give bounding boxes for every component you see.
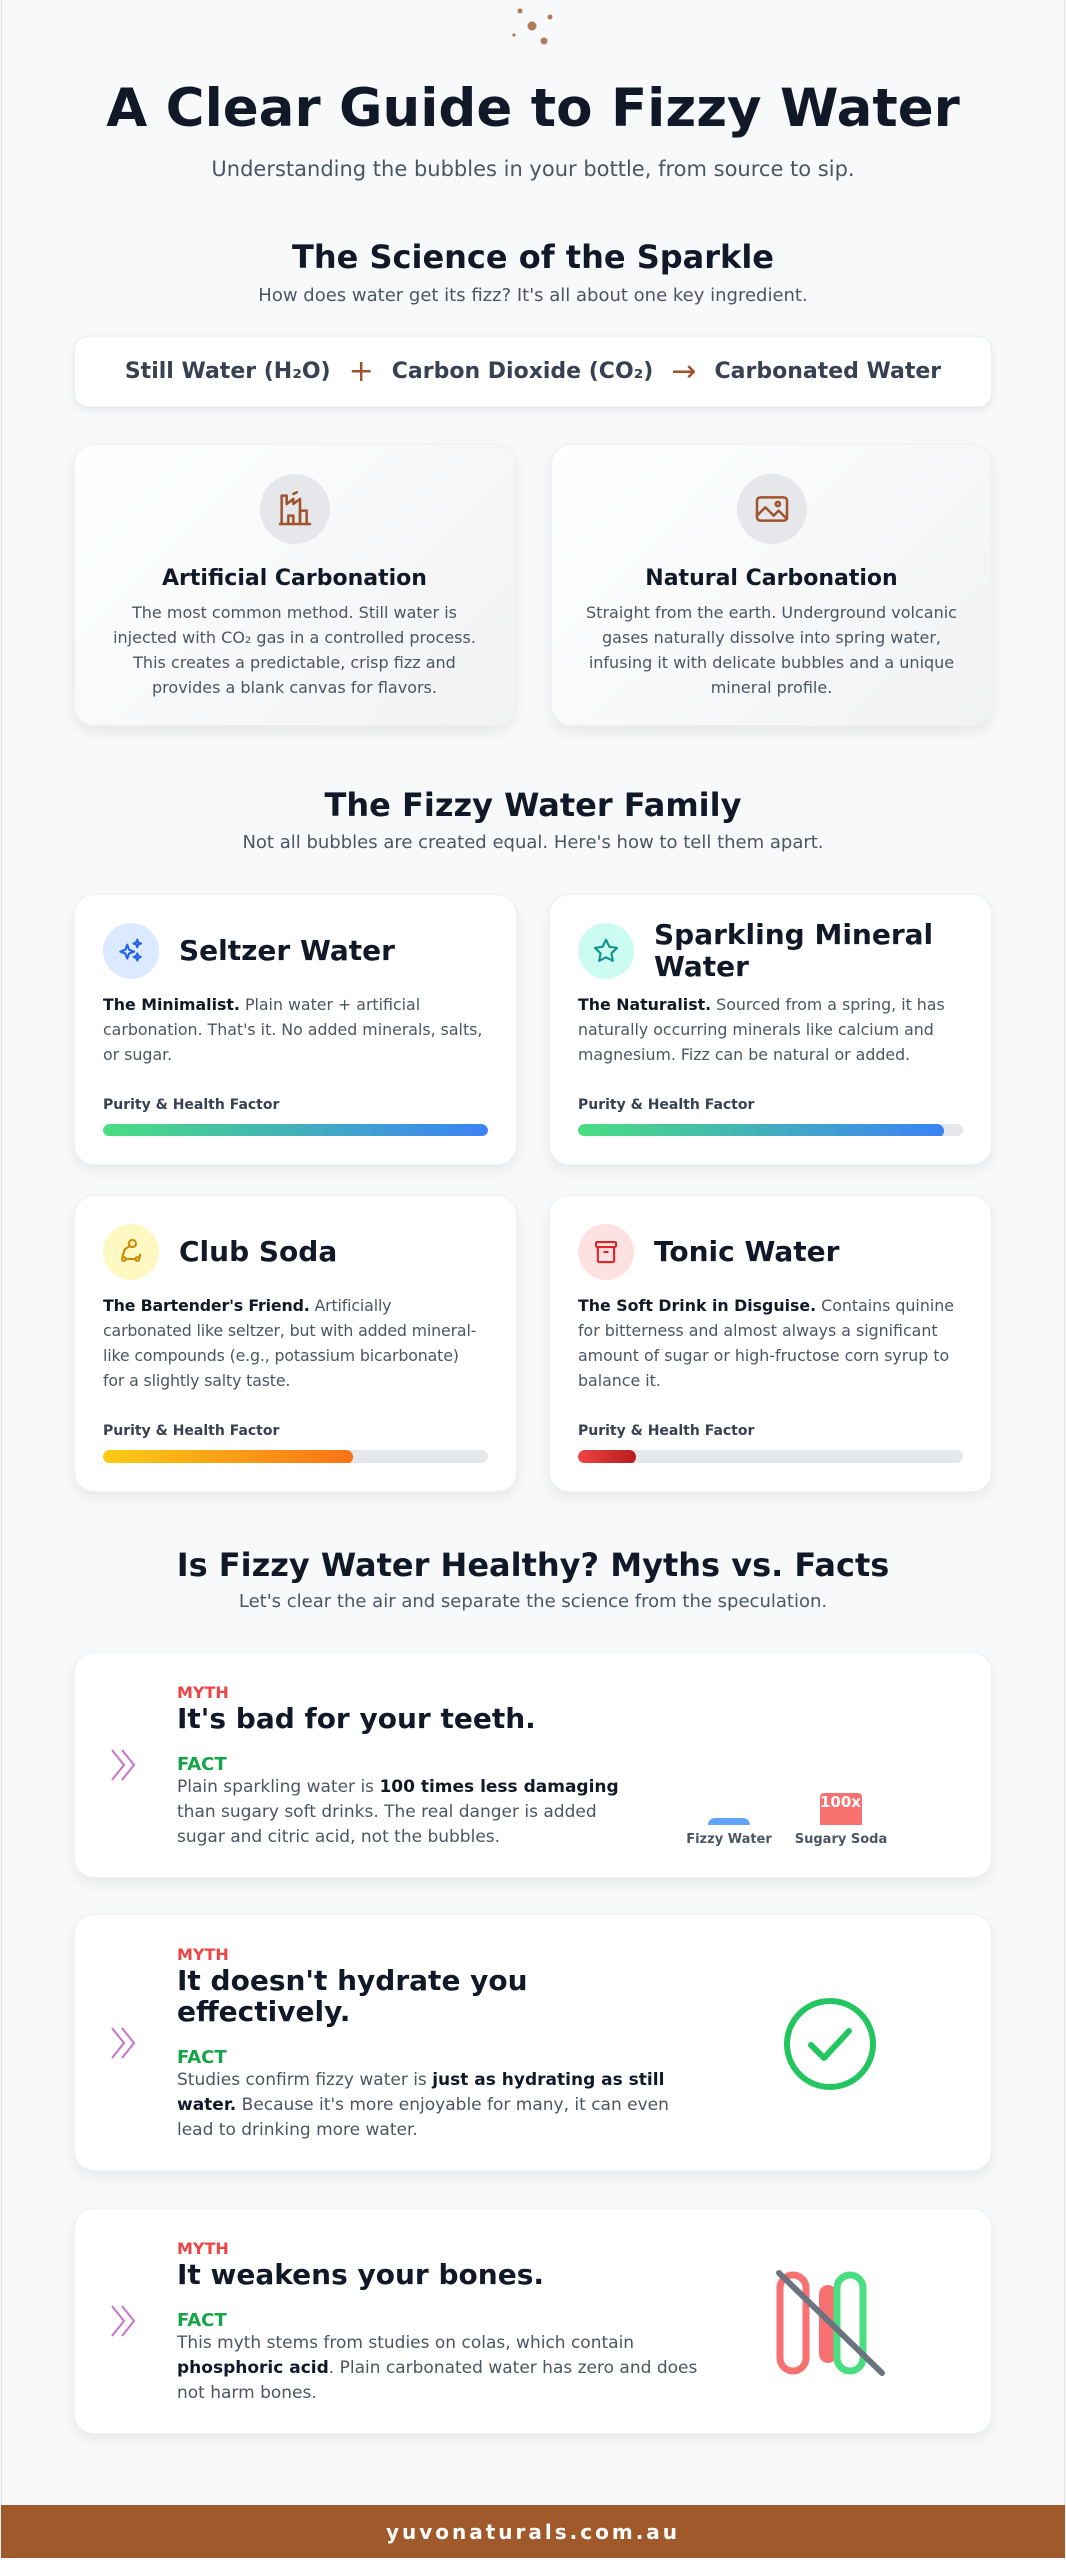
panel: tonic: The Soft Drink in Disguise. Contains quinine for bitterness and almost always a significant amount of sugar or high-fructose corn syrup to balance it.	[578, 1296, 954, 1390]
icon: chevrons	[111, 1749, 136, 1781]
panel: myth teeth: Plain sparkling water is 100 times less damaging than sugary soft drinks. The real danger is added sugar and citric acid, not the bubbles.	[177, 1777, 619, 1847]
title: A Clear Guide to Fizzy Water	[106, 78, 960, 139]
panel: sparkling mineral	[549, 894, 992, 1165]
panel: myth hydration: FACT	[177, 2047, 227, 2068]
panel: myth hydration: MYTH	[177, 1945, 229, 1964]
equation box: Still Water (H₂O)	[125, 359, 331, 384]
panel: natural carbonation: Natural Carbonation	[645, 566, 898, 591]
equation box: →	[671, 354, 696, 389]
panel: sparkling mineral: Sparkling Mineral Water	[654, 918, 933, 983]
panel: tonic	[549, 1195, 992, 1492]
panel: club soda: Club Soda	[179, 1235, 337, 1268]
icon: factory	[260, 474, 330, 544]
footer	[1, 2505, 1065, 2558]
panel: sparkling mineral: The Naturalist. Sourced from a spring, it has naturally occurring minerals like calcium and magnesium. Fizz can be natural or added.	[578, 995, 945, 1064]
icon: chevrons	[111, 2027, 136, 2059]
bar chart: fizzy vs soda	[686, 1793, 887, 1847]
equation box: Carbon Dioxide (CO₂)	[392, 359, 653, 384]
panel: club soda: for a slightly salty taste.	[103, 1371, 290, 1390]
panel: myth teeth: It's bad for your teeth.	[177, 1702, 536, 1735]
panel: myth bones: FACT	[177, 2310, 227, 2331]
icon: check circle	[784, 1998, 876, 2090]
panel: seltzer: The Minimalist. Plain water + artificial carbonation. That's it. No added minerals, salts, or sugar.	[103, 995, 482, 1064]
panel: myth hydration: It doesn't hydrate you effectively.	[177, 1964, 528, 2028]
panel: club soda	[74, 1195, 517, 1492]
panel: artificial carbonation: The most common method. Still water is injected with CO₂ gas in a controlled process. This creates a predictable, crisp fizz and provides a blank canvas for flavors.	[113, 603, 476, 697]
panel: artificial carbonation: Artificial Carbonation	[162, 566, 427, 591]
panel: club soda: carbonated like seltzer, but with added mineral-like compounds (e.g., potassium bicarbonate)	[103, 1321, 476, 1365]
subheading: family: Not all bubbles are created equal. Here's how to tell them apart.	[242, 832, 824, 853]
icon: bubbles	[512, 8, 552, 44]
panel: myth bones: MYTH	[177, 2239, 229, 2258]
footer: yuvonaturals.com.au	[386, 2520, 680, 2544]
panel: myth bones	[74, 2208, 992, 2434]
panel: myth bones: This myth stems from studies on colas, which contain	[177, 2333, 634, 2353]
panel: seltzer	[74, 894, 517, 1165]
panel: myth bones: phosphoric acid. Plain carbonated water has zero and does not harm bones.	[177, 2358, 697, 2403]
icon: landscape	[736, 474, 806, 544]
panel: natural carbonation	[551, 444, 992, 726]
subtitle: Understanding the bubbles in your bottle, from source to sip.	[211, 157, 855, 181]
panel: club soda: Purity & Health Factor	[103, 1423, 279, 1439]
heading: family: The Fizzy Water Family	[325, 786, 741, 824]
icon: crossed bones	[776, 2270, 885, 2376]
panel: myth teeth: FACT	[177, 1754, 227, 1775]
equation box: Carbonated Water	[714, 359, 941, 384]
heading: science: The Science of the Sparkle	[292, 238, 774, 276]
subheading: myths: Let's clear the air and separate the science from the speculation.	[239, 1591, 827, 1612]
equation box: +	[349, 354, 374, 389]
panel: seltzer: Purity & Health Factor	[103, 1097, 279, 1113]
panel: natural carbonation: Straight from the earth. Underground volcanic gases naturally dissolve into spring water, infusing it with delicate bubbles and a unique mineral profile.	[586, 603, 957, 697]
icon: chevrons	[111, 2305, 136, 2337]
bar chart: fizzy vs soda: 100x	[820, 1793, 861, 1811]
panel: seltzer: Seltzer Water	[179, 934, 395, 967]
bar chart: fizzy vs soda: Sugary Soda	[795, 1832, 887, 1847]
panel: myth teeth: MYTH	[177, 1683, 229, 1702]
heading: myths: Is Fizzy Water Healthy? Myths vs. Facts	[177, 1546, 889, 1584]
panel: myth hydration: Studies confirm fizzy water is just as hydrating as still water. Because it's more enjoyable for many, it can even lead to drinking more water.	[177, 2070, 669, 2140]
panel: tonic: Tonic Water	[654, 1235, 839, 1268]
panel: artificial carbonation	[74, 444, 515, 726]
equation box	[74, 336, 992, 407]
subheading: science: How does water get its fizz? It's all about one key ingredient.	[258, 285, 808, 306]
panel: myth teeth	[74, 1652, 992, 1878]
panel: sparkling mineral: Purity & Health Factor	[578, 1097, 754, 1113]
panel: myth bones: It weakens your bones.	[177, 2258, 544, 2291]
panel: club soda: The Bartender's Friend. Artificially	[103, 1296, 391, 1315]
panel: tonic: Purity & Health Factor	[578, 1423, 754, 1439]
panel: myth hydration	[74, 1914, 992, 2171]
bar chart: fizzy vs soda: Fizzy Water	[686, 1832, 772, 1847]
